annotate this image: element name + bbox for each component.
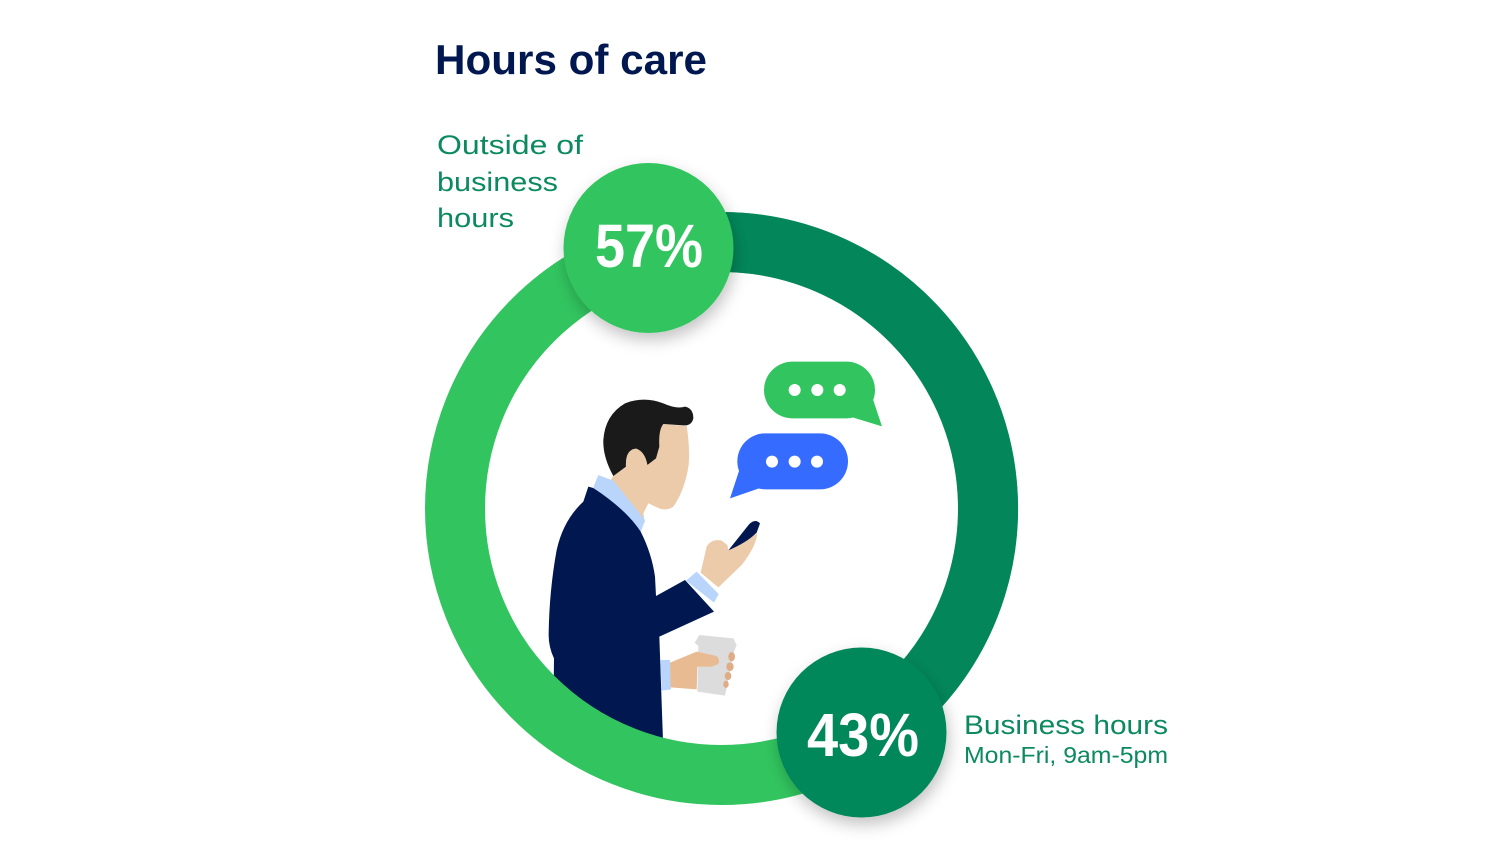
lower cuff: [660, 660, 671, 691]
label: outside of business hours: [437, 130, 584, 233]
lower hand: [670, 652, 719, 689]
badge: 57%: [564, 163, 734, 333]
donut chart: 57 / 43: [455, 242, 988, 775]
label: business hours: Mon-Fri, 9am-5pm: [964, 742, 1168, 768]
ring segment: outside of business hours: [455, 242, 988, 775]
label: business hours: Business hours: [964, 710, 1168, 740]
title: Hours of care: [435, 36, 707, 83]
fingers: [723, 652, 735, 688]
coffee cup: [695, 635, 737, 696]
upper hand: [701, 533, 757, 587]
badge: 43%: 43%: [807, 701, 919, 769]
face and neck: [610, 424, 689, 523]
label: outside of business hours: business: [437, 167, 558, 197]
upper cuff: [686, 572, 719, 603]
phone: [728, 521, 760, 550]
label: business hours: [964, 710, 1168, 768]
badge: 57%: 57%: [595, 212, 703, 280]
speech bubble: green: [764, 362, 882, 426]
speech bubble: blue: [730, 433, 848, 498]
hair: [603, 400, 693, 476]
label: outside of business hours: hours: [437, 203, 514, 233]
jacket: [549, 487, 714, 750]
illustration: man on phone with coffee: [549, 362, 882, 750]
collar: [593, 475, 645, 533]
label: outside of business hours: Outside of: [437, 130, 584, 160]
badge: 43%: [776, 648, 946, 818]
ear: [626, 449, 647, 475]
ring segment: business hours: [650, 242, 988, 735]
